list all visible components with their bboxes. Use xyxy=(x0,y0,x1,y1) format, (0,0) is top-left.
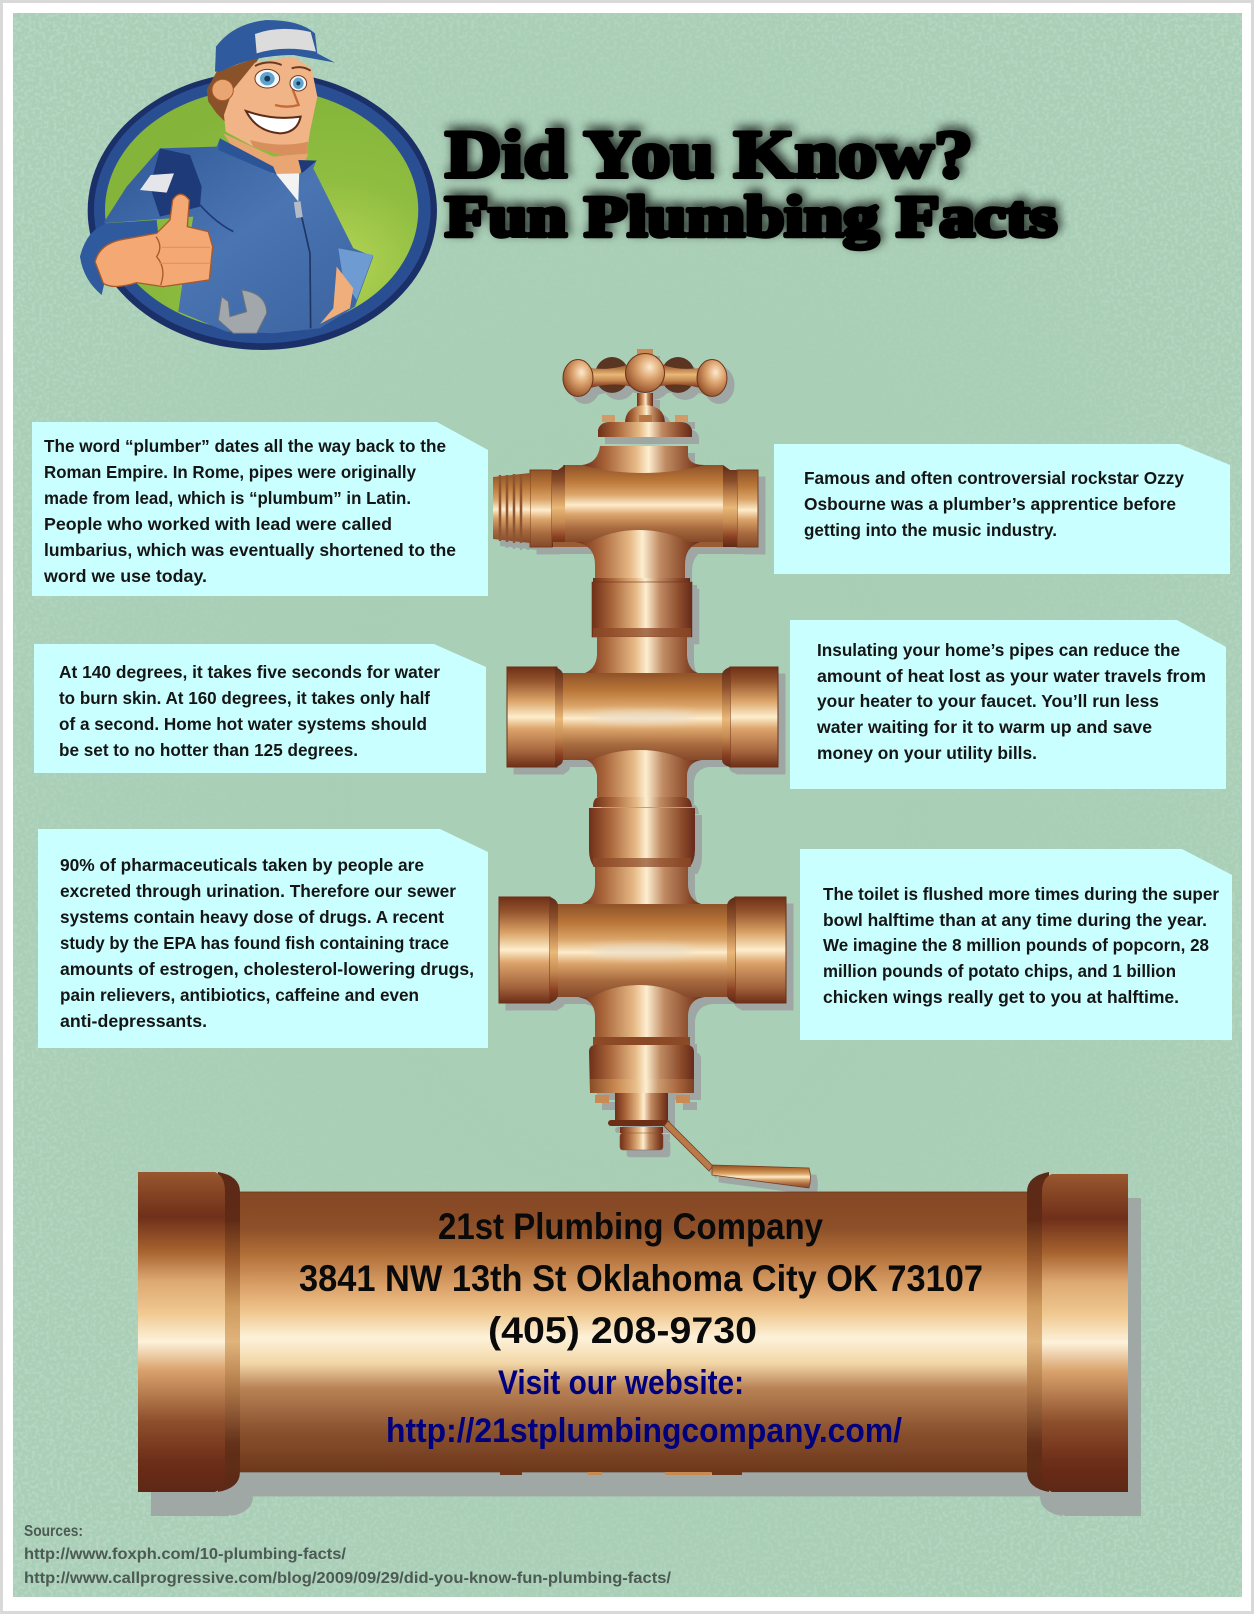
text block xyxy=(59,662,440,760)
text block: lumbarius, which was eventually shortened to the xyxy=(44,540,456,560)
pipe body xyxy=(235,1192,1032,1472)
panel: plumber word origin xyxy=(32,422,488,596)
text block xyxy=(823,884,1219,1007)
text block: your heater to your faucet. You’ll run less xyxy=(817,691,1159,711)
icon: plumber mascot xyxy=(80,20,437,350)
panel: copper pipe contact banner xyxy=(138,1172,1128,1492)
middle cross fitting xyxy=(507,667,778,767)
icon: copper valve pipe assembly xyxy=(493,349,810,1188)
text block xyxy=(43,436,456,586)
mascot eyebrows xyxy=(255,62,311,71)
text block: anti-depressants. xyxy=(60,1011,207,1031)
text block: to burn skin. At 160 degrees, it takes only half xyxy=(59,688,430,708)
panel: super bowl toilet xyxy=(800,849,1232,1040)
panel: pharmaceuticals in sewers xyxy=(38,829,488,1048)
upper coupling xyxy=(592,578,692,637)
text block xyxy=(804,468,1184,540)
mascot sleeve badge xyxy=(140,173,174,193)
mascot right hand xyxy=(320,267,353,324)
text block: People who worked with lead were called xyxy=(44,514,392,534)
mascot neck and collar xyxy=(223,133,308,174)
bottom stem xyxy=(578,985,705,1037)
text block: systems contain heavy dose of drugs. A recent xyxy=(60,907,444,927)
stem above lower cross xyxy=(578,867,705,905)
website label: Visit our website: xyxy=(498,1364,744,1402)
text block: word we use today. xyxy=(43,566,207,586)
lower cross fitting xyxy=(499,897,786,1003)
left pipe flange xyxy=(138,1172,240,1492)
text block: chicken wings really get to you at halftime. xyxy=(823,987,1179,1007)
lower coupling xyxy=(589,797,695,867)
mascot face xyxy=(224,57,317,155)
text block: amounts of estrogen, cholesterol-lowering drugs, xyxy=(60,959,474,979)
text block: The word “plumber” dates all the way back to the xyxy=(44,436,446,456)
text block: made from lead, which is “plumbum” in Latin. xyxy=(44,488,411,508)
text block: getting into the music industry. xyxy=(804,520,1057,540)
panel: water burn temperature xyxy=(34,644,486,773)
sources: http://www.callprogressive.com/blog/2009/09/29/did-you-know-fun-plumbing-facts/ xyxy=(24,1570,672,1587)
title xyxy=(445,116,1057,249)
company name: 21st Plumbing Company xyxy=(438,1206,823,1247)
panel: Ozzy Osbourne xyxy=(774,444,1230,574)
upper tee fitting xyxy=(493,446,758,547)
sources: Sources: xyxy=(24,1523,83,1540)
valve handle xyxy=(563,349,727,437)
upper vertical stem xyxy=(575,530,700,582)
lower stem xyxy=(580,750,702,797)
text block: money on your utility bills. xyxy=(817,743,1037,763)
valve drain stem xyxy=(608,1093,670,1150)
text block: The toilet is flushed more times during the super xyxy=(823,884,1219,904)
text block: pain relievers, antibiotics, caffeine and even xyxy=(60,985,419,1005)
drain lever xyxy=(664,1121,810,1188)
text block: study by the EPA has found fish containing trace xyxy=(60,933,449,953)
mascot hair xyxy=(207,57,260,123)
mascot thumbs-up hand xyxy=(95,194,213,287)
text block: Insulating your home’s pipes can reduce the xyxy=(817,640,1180,660)
right pipe flange xyxy=(1027,1172,1128,1492)
sources xyxy=(24,1523,672,1587)
mascot cap xyxy=(215,20,335,72)
threaded pipe end xyxy=(493,473,530,543)
text block: be set to no hotter than 125 degrees. xyxy=(59,740,358,760)
text block: water waiting for it to warm up and save xyxy=(816,717,1152,737)
text block: excreted through urination. Therefore our sewer xyxy=(60,881,456,901)
mascot cuff xyxy=(80,220,158,295)
text block: Famous and often controversial rockstar Ozzy xyxy=(804,468,1184,488)
mascot shirt xyxy=(275,171,299,202)
bottom cap xyxy=(589,1037,694,1103)
company address: 3841 NW 13th St Oklahoma City OK 73107 xyxy=(299,1258,983,1299)
text block: million pounds of potato chips, and 1 billion xyxy=(823,961,1176,981)
mascot coat xyxy=(103,138,373,333)
title line 1: Did You Know? xyxy=(445,116,973,192)
website url: http://21stplumbingcompany.com/ xyxy=(386,1412,903,1450)
mascot eyes xyxy=(255,69,280,88)
text block: Osbourne was a plumber’s apprentice before xyxy=(804,494,1176,514)
text block: of a second. Home hot water systems should xyxy=(59,714,427,734)
pipe underside scraps xyxy=(500,1472,742,1475)
company phone: (405) 208-9730 xyxy=(488,1310,757,1351)
text block: We imagine the 8 million pounds of popcorn, 28 xyxy=(823,935,1209,955)
text block xyxy=(60,855,474,1031)
text block: Roman Empire. In Rome, pipes were originally xyxy=(44,462,416,482)
sources: http://www.foxph.com/10-plumbing-facts/ xyxy=(24,1546,347,1563)
text block: 90% of pharmaceuticals taken by people are xyxy=(60,855,424,875)
panel: insulating pipes xyxy=(790,620,1226,789)
text block: At 140 degrees, it takes five seconds for water xyxy=(59,662,440,682)
text block: amount of heat lost as your water travels from xyxy=(817,666,1206,686)
title line 2: Fun Plumbing Facts xyxy=(445,184,1057,249)
middle stem xyxy=(582,637,702,674)
mascot wrench xyxy=(218,290,267,333)
mascot badge ring xyxy=(88,71,437,350)
text block xyxy=(816,640,1206,763)
text block: bowl halftime than at any time during the year. xyxy=(823,910,1207,930)
mascot smile xyxy=(246,111,301,133)
